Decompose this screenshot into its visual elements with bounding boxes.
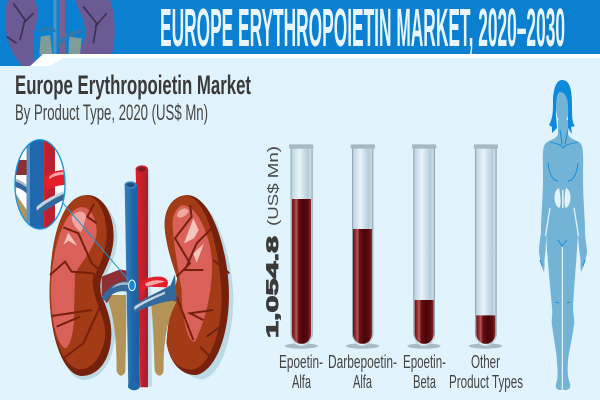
right kidney [165,195,229,375]
header banner [0,0,600,68]
label: Darbepoetin-Alfa [328,351,397,392]
ureters [105,295,177,376]
pointer line [63,203,128,280]
value: 1,054.8 [263,236,282,338]
test tube chart [285,144,502,349]
banner background [0,0,600,66]
body kidneys [554,188,570,208]
human body figure [539,80,587,390]
face [556,91,569,123]
renal artery right [140,277,168,295]
label: Darbepoetin-Alfa: Darbepoetin- [328,351,397,372]
pointer ring [129,280,135,291]
white banner edge [0,54,600,66]
left kidney [50,195,114,376]
tube: Darbepoetin-Alfa [346,144,379,349]
label: Other Product Types: Other [471,351,500,372]
label: Epoetin-Beta: Epoetin- [403,351,446,372]
renal veins [102,274,177,313]
label: Epoetin-Beta [403,351,446,392]
label: Darbepoetin-Alfa: Alfa [353,371,372,392]
body detail lines [540,130,585,303]
chart heading: Europe Erythropoietin Market [15,72,251,100]
label: Epoetin-Alfa [279,351,323,392]
label: Epoetin-Alfa: Epoetin- [279,351,323,372]
axis value label [263,146,282,338]
chart subheading: By Product Type, 2020 (US$ Mn) [15,101,208,125]
label: Epoetin-Beta: Beta [413,371,436,392]
kidney illustration [13,137,233,390]
label: Other Product Types: Product Types [449,371,523,392]
unit: (US$ Mn) [266,146,282,226]
vena cava [124,181,140,390]
body silhouette [539,120,587,390]
label: Other Product Types [449,351,523,392]
hair [549,80,575,134]
label: Epoetin-Alfa: Alfa [292,371,311,392]
torso and arm gaps [546,208,578,236]
banner kidney illustration [5,0,115,68]
tube: Other Product Types [469,144,502,349]
renal artery left [102,269,140,303]
aorta [136,165,152,387]
kidney shadows [53,198,117,380]
tube: Epoetin-Alfa [285,144,318,349]
magnified detail lens [13,137,67,233]
tube: Epoetin-Beta [407,144,441,349]
category labels [279,351,523,392]
